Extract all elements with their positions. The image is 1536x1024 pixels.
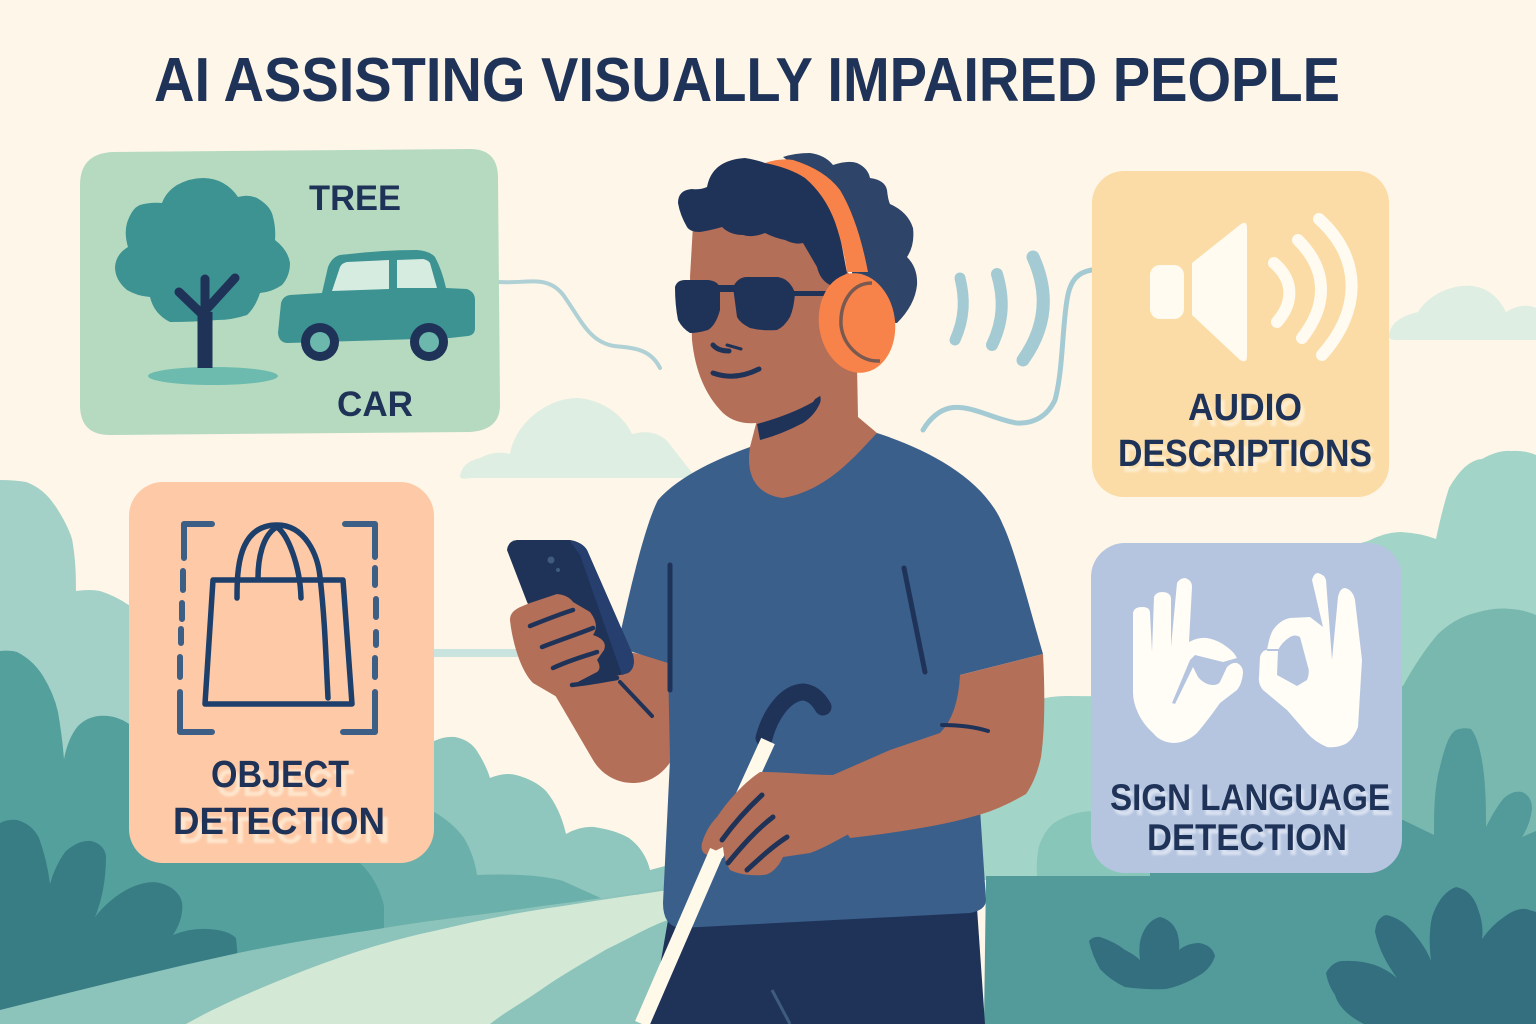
icon: sound waves near ear <box>955 257 1043 360</box>
icon: shopping bag in detection frame <box>180 524 376 732</box>
trousers <box>650 908 985 1024</box>
label: sign language detection: SIGN LANGUAGE <box>1110 777 1390 818</box>
label: audio descriptions: DESCRIPTIONS <box>1118 433 1372 475</box>
icon: signing hands <box>1133 573 1362 747</box>
label: car: CAR <box>337 385 413 424</box>
hair: back <box>783 153 917 323</box>
panel: audio descriptions <box>1092 171 1389 497</box>
icon: speaker with sound waves <box>1150 219 1352 361</box>
lower hand on cane <box>702 765 880 875</box>
hair: front <box>678 158 847 285</box>
head <box>690 215 862 423</box>
neck shadow <box>757 390 821 440</box>
connector: object panel to user <box>498 281 660 368</box>
panel: tree and car <box>80 149 500 435</box>
label: object detection <box>173 754 385 843</box>
panel: sign language detection <box>1091 543 1402 873</box>
nose and mouth <box>713 345 759 376</box>
label: tree: TREE <box>309 179 401 218</box>
sunglasses <box>675 277 828 333</box>
headphones <box>765 159 902 378</box>
cane <box>716 692 823 855</box>
neck <box>749 365 877 498</box>
label: audio descriptions <box>1118 387 1372 475</box>
label: audio descriptions: AUDIO <box>1188 387 1302 429</box>
label: sign language detection <box>1110 777 1390 858</box>
illustration: person with cane and phone <box>507 153 1044 1024</box>
title: AI ASSISTING VISUALLY IMPAIRED PEOPLE <box>154 46 1340 115</box>
label: object detection: OBJECT <box>211 754 349 796</box>
left arm <box>555 650 673 783</box>
connector: bag panel to phone <box>434 649 518 657</box>
label: sign language detection: DETECTION <box>1147 817 1347 858</box>
phone <box>507 540 652 716</box>
t-shirt <box>620 433 1043 928</box>
cane lower section <box>642 851 717 1024</box>
icon: car <box>278 250 475 361</box>
right arm <box>820 654 1044 838</box>
connector: audio panel to user <box>923 270 1092 430</box>
label: object detection: DETECTION <box>173 801 385 843</box>
hand on phone <box>510 594 605 697</box>
icon: tree <box>115 178 290 385</box>
panel: object detection <box>129 482 434 863</box>
